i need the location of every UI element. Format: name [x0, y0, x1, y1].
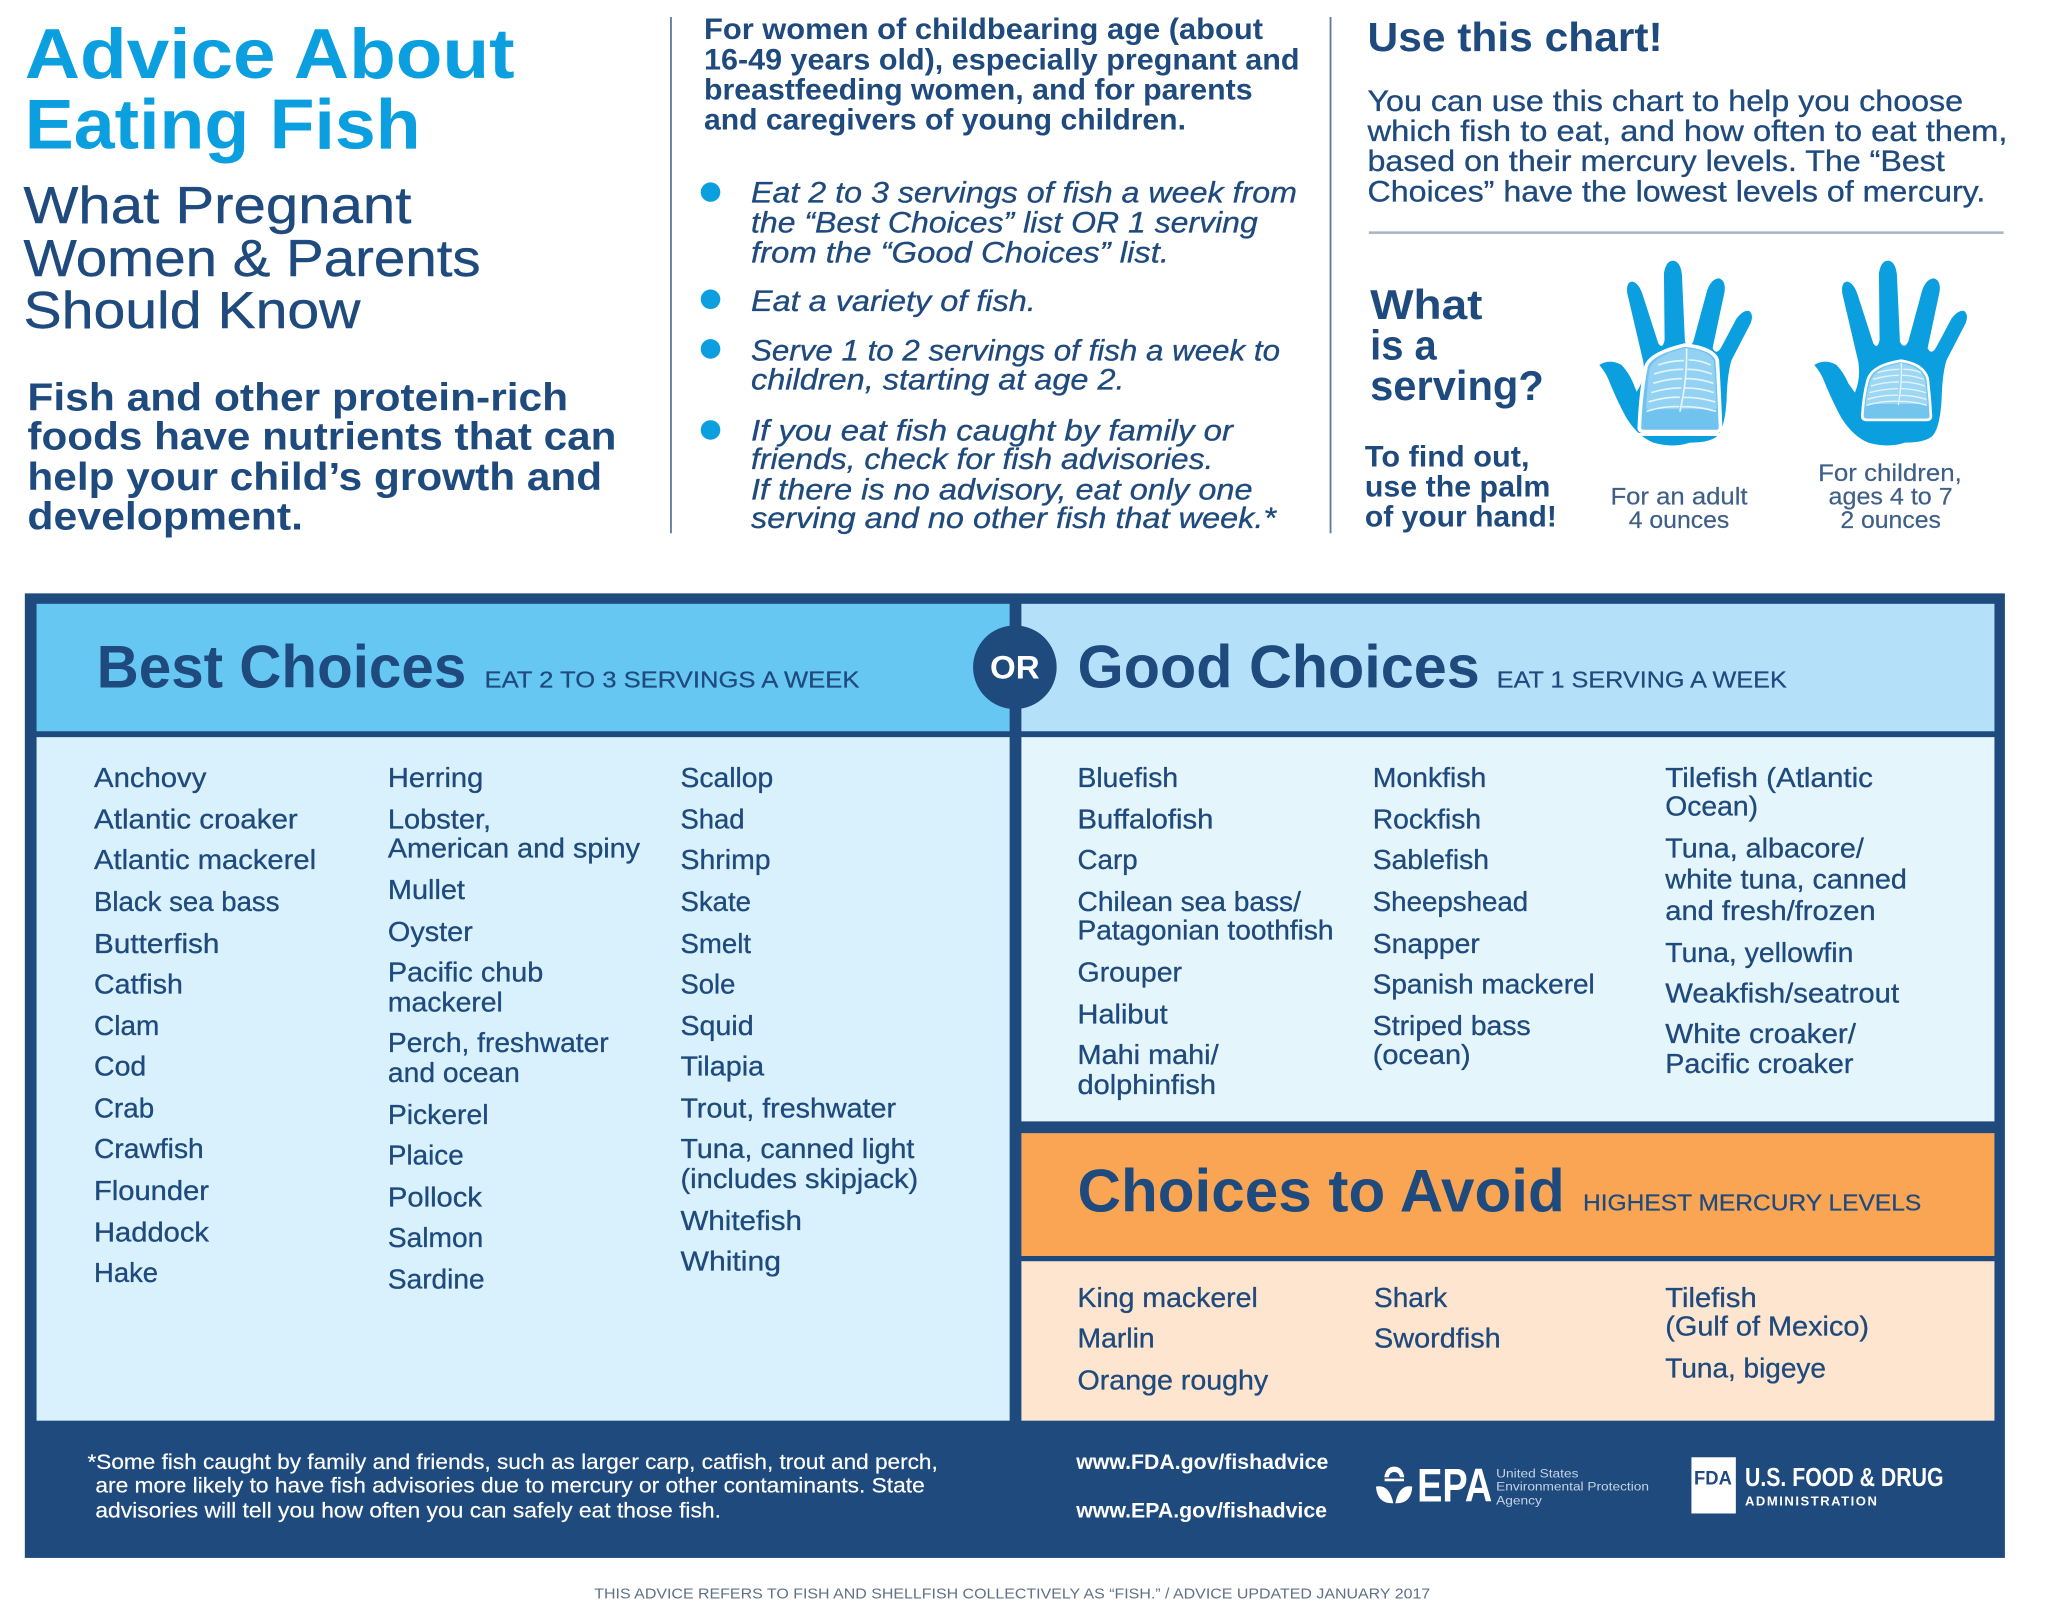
good choices list: column 2: Rockfish [1373, 804, 1481, 835]
chart usage column [1365, 14, 2008, 534]
best choices list: column 3: (includes skipjack) [680, 1163, 918, 1194]
audience heading [704, 13, 1300, 136]
best choices list: column 1: Haddock [94, 1217, 209, 1248]
bullet 1: from the “Good Choices” list. [751, 237, 1169, 270]
footnote: are more likely to have fish advisories due to mercury or other contaminants. State [95, 1475, 925, 1498]
OR badge [973, 625, 1057, 709]
best choices list: column 3: Smelt [680, 928, 751, 959]
best choices list: column 1: Clam [94, 1010, 159, 1041]
good choices list: column 3: Pacific croaker [1665, 1048, 1853, 1079]
icon: child hand with fish [1814, 261, 1967, 445]
best choices list: column 2: Oyster [388, 916, 473, 947]
footnote [88, 1451, 938, 1522]
intro text: development. [27, 495, 303, 538]
main title: Advice About [25, 14, 515, 93]
best choices list: column 3: Trout, freshwater [680, 1092, 896, 1123]
best choices list: column 1 [94, 762, 316, 1288]
good choices list: column 3: Ocean) [1665, 791, 1758, 822]
best choices list: column 2: American and spiny [388, 832, 640, 863]
good choices list: column 2: Striped bass [1373, 1010, 1531, 1041]
good choices list: column 3: and fresh/frozen [1665, 895, 1876, 926]
bullet 1 [701, 177, 1297, 270]
best choices list: column 2: Pollock [388, 1181, 482, 1212]
best choices header: EAT 2 TO 3 SERVINGS A WEEK [485, 666, 860, 692]
caption: adult serving: 4 ounces [1629, 507, 1729, 534]
good choices list: column 3: White croaker/ [1665, 1018, 1856, 1049]
chart usage text [1366, 85, 2008, 208]
best choices list: column 2: Herring [388, 762, 483, 793]
caption: child serving: ages 4 to 7 [1829, 483, 1953, 510]
website links [1075, 1451, 1328, 1522]
title block [24, 14, 616, 538]
best choices list: column 3: Shad [680, 804, 744, 835]
palm instruction: of your hand! [1365, 501, 1557, 534]
best choices list: column 1: Black sea bass [94, 886, 280, 917]
website links: www.EPA.gov/fishadvice [1075, 1499, 1327, 1522]
logo: FDA: ADMINISTRATION [1745, 1494, 1877, 1509]
footnote: *Some fish caught by family and friends, such as larger carp, catfish, trout and perch, [88, 1451, 938, 1474]
best choices list: column 2: Sardine [388, 1264, 485, 1295]
logo: FDA [1691, 1457, 1944, 1513]
caption: adult serving [1610, 483, 1748, 534]
chart usage text: Choices” have the lowest levels of mercury. [1368, 175, 1985, 208]
logo: EPA: EPA [1417, 1459, 1492, 1512]
best choices header: Best Choices [97, 633, 466, 700]
bottom note: THIS ADVICE REFERS TO FISH AND SHELLFISH COLLECTIVELY AS “FISH.” / ADVICE UPDATED JANUARY 2017 [594, 1585, 1430, 1602]
best choices list: column 3: Sole [680, 968, 735, 999]
panel: good choices [1021, 604, 1994, 1121]
serving heading: is a [1370, 321, 1437, 368]
best choices list: column 1: Atlantic croaker [94, 804, 298, 835]
intro text: foods have nutrients that can [27, 416, 616, 459]
fish chart frame [25, 593, 2005, 1558]
subtitle: What Pregnant [24, 177, 412, 235]
palm instruction: To find out, [1365, 441, 1529, 474]
best choices list: column 3: Scallop [680, 762, 773, 793]
good choices list: column 3: Tuna, yellowfin [1665, 937, 1853, 968]
intro text [27, 376, 616, 538]
choices to avoid header [1021, 1133, 1994, 1256]
serving heading [1370, 281, 1544, 409]
best choices list: column 2: Mullet [388, 874, 465, 905]
caption: child serving: For children, [1818, 460, 1962, 487]
avoid list: column 3 [1665, 1282, 1869, 1384]
best choices list: column 2: Pacific chub [388, 957, 543, 988]
caption: adult serving: For an adult [1610, 483, 1748, 510]
caption: child serving: 2 ounces [1840, 507, 1941, 534]
choices to avoid header: HIGHEST MERCURY LEVELS [1583, 1189, 1921, 1215]
best choices list: column 1: Catfish [94, 968, 183, 999]
logo: FDA: U.S. FOOD & DRUG [1745, 1462, 1944, 1492]
best choices header [37, 604, 1010, 731]
avoid list: column 1: Orange roughy [1078, 1364, 1269, 1395]
good choices list: column 1: Bluefish [1078, 762, 1178, 793]
chart usage text: which fish to eat, and how often to eat them, [1366, 115, 2008, 148]
best choices list: column 3: Skate [680, 886, 751, 917]
good choices list: column 3: Tuna, albacore/ [1665, 832, 1864, 863]
caption: child serving [1818, 460, 1962, 534]
subtitle: Should Know [24, 282, 361, 340]
bullet 4: serving and no other fish that week.* [751, 502, 1277, 535]
best choices list: column 3: Tuna, canned light [680, 1133, 915, 1164]
footnote: advisories will tell you how often you can safely eat those fish. [95, 1499, 721, 1522]
good choices list: column 3: Weakfish/seatrout [1665, 977, 1899, 1008]
good choices list: column 1: Buffalofish [1078, 804, 1213, 835]
avoid list: column 3: Tuna, bigeye [1665, 1353, 1826, 1384]
avoid list: column 2: Shark [1374, 1282, 1447, 1313]
avoid list: column 2: Swordfish [1374, 1322, 1501, 1353]
good choices list: column 1: Chilean sea bass/ [1078, 886, 1301, 917]
best choices list: column 1: Flounder [94, 1175, 209, 1206]
logo: FDA: FDA [1694, 1468, 1732, 1490]
good choices list: column 1: Halibut [1078, 998, 1168, 1029]
bullet 1: Eat 2 to 3 servings of fish a week from [751, 177, 1297, 210]
chart usage text: You can use this chart to help you choose [1368, 85, 1963, 118]
advice column [701, 13, 1300, 535]
good choices list: column 1 [1078, 762, 1334, 1100]
good choices list: column 1: Grouper [1078, 957, 1182, 988]
best choices list: column 1: Cod [94, 1051, 146, 1082]
logo: EPA: Environmental Protection [1496, 1480, 1649, 1494]
best choices list: column 2 [388, 762, 640, 1295]
intro text: Fish and other protein-rich [27, 376, 568, 419]
best choices list: column 1: Atlantic mackerel [94, 844, 316, 875]
choices to avoid header: Choices to Avoid [1078, 1158, 1565, 1225]
best choices list: column 1: Crawfish [94, 1133, 204, 1164]
good choices list: column 2 [1373, 762, 1595, 1070]
panel: choices to avoid [1021, 1133, 1994, 1421]
avoid list: column 3: (Gulf of Mexico) [1665, 1311, 1869, 1342]
best choices list: column 2: Salmon [388, 1222, 483, 1253]
best choices list: column 1: Anchovy [94, 762, 207, 793]
best choices list: column 2: Lobster, [388, 804, 491, 835]
avoid list: column 2 [1374, 1282, 1501, 1353]
best choices list: column 3 [680, 762, 918, 1276]
good choices header [1021, 604, 1994, 731]
best choices list: column 3: Shrimp [680, 844, 771, 875]
good choices list: column 2: Sheepshead [1373, 886, 1528, 917]
best choices list: column 1: Crab [94, 1092, 154, 1123]
palm instruction: use the palm [1365, 471, 1550, 504]
EPA flower symbol [1376, 1467, 1412, 1503]
subtitle [24, 177, 481, 340]
OR badge: OR [990, 648, 1040, 685]
good choices list: column 1: Carp [1078, 844, 1138, 875]
avoid list: column 3: Tilefish [1665, 1282, 1757, 1313]
panel: best choices [37, 604, 1010, 1421]
bullet 2: Eat a variety of fish. [751, 285, 1036, 318]
avoid list: column 1: Marlin [1078, 1322, 1155, 1353]
audience heading: breastfeeding women, and for parents [704, 73, 1253, 106]
serving heading: What [1370, 281, 1483, 328]
bullet 3: Serve 1 to 2 servings of fish a week to [751, 335, 1280, 368]
bullet 3: children, starting at age 2. [751, 363, 1125, 396]
logo: EPA: Agency [1496, 1493, 1543, 1507]
good choices list: column 3: Tilefish (Atlantic [1665, 762, 1873, 793]
best choices list: column 3: Whitefish [680, 1205, 802, 1236]
good choices list: column 2: Snapper [1373, 928, 1480, 959]
best choices list: column 3: Squid [680, 1010, 754, 1041]
bullet 1: the “Best Choices” list OR 1 serving [751, 207, 1258, 240]
footer band [88, 1451, 1944, 1522]
icon: adult hand with fish [1599, 261, 1752, 445]
audience heading: For women of childbearing age (about [704, 13, 1263, 46]
good choices list: column 3 [1664, 762, 1907, 1079]
audience heading: and caregivers of young children. [704, 103, 1186, 136]
main title: Eating Fish [25, 84, 421, 163]
good choices list: column 1: Mahi mahi/ [1078, 1039, 1219, 1070]
chart usage text: based on their mercury levels. The “Best [1368, 145, 1946, 178]
good choices list: column 1: dolphinfish [1078, 1069, 1216, 1100]
best choices list: column 2: Perch, freshwater [388, 1027, 609, 1058]
bullet 4: If there is no advisory, eat only one [751, 473, 1253, 506]
best choices list: column 2: and ocean [388, 1057, 520, 1088]
good choices list: column 2: Spanish mackerel [1373, 968, 1595, 999]
best choices list: column 2: Pickerel [388, 1099, 488, 1130]
website links: www.FDA.gov/fishadvice [1075, 1451, 1328, 1474]
avoid list: column 1: King mackerel [1078, 1282, 1258, 1313]
bullet 3 [701, 335, 1280, 396]
good choices list: column 2: (ocean) [1373, 1039, 1471, 1070]
best choices list: column 1: Hake [94, 1257, 158, 1288]
main title [25, 14, 515, 163]
bullet 4 [701, 414, 1277, 535]
intro text: help your child’s growth and [27, 456, 602, 499]
logo: EPA [1376, 1459, 1649, 1512]
best choices list: column 2: mackerel [388, 987, 503, 1018]
good choices list: column 3: white tuna, canned [1664, 864, 1907, 895]
audience heading: 16-49 years old), especially pregnant and [704, 43, 1300, 76]
bullet 4: If you eat fish caught by family or [751, 414, 1235, 447]
logo: EPA: United States [1496, 1467, 1578, 1481]
heading: use this chart: Use this chart! [1368, 14, 1663, 60]
avoid list: column 1 [1078, 1282, 1269, 1395]
good choices list: column 2: Monkfish [1373, 762, 1486, 793]
best choices list: column 2: Plaice [388, 1140, 464, 1171]
subtitle: Women & Parents [24, 230, 481, 288]
palm instruction [1365, 441, 1557, 534]
best choices list: column 3: Tilapia [680, 1051, 765, 1082]
good choices list: column 2: Sablefish [1373, 844, 1489, 875]
best choices list: column 3: Whiting [680, 1245, 781, 1276]
best choices list: column 1: Butterfish [94, 928, 219, 959]
good choices header: EAT 1 SERVING A WEEK [1497, 666, 1787, 692]
good choices header: Good Choices [1078, 633, 1480, 700]
bullet 4: friends, check for fish advisories. [751, 443, 1213, 476]
serving heading: serving? [1370, 362, 1544, 409]
good choices list: column 1: Patagonian toothfish [1078, 915, 1334, 946]
